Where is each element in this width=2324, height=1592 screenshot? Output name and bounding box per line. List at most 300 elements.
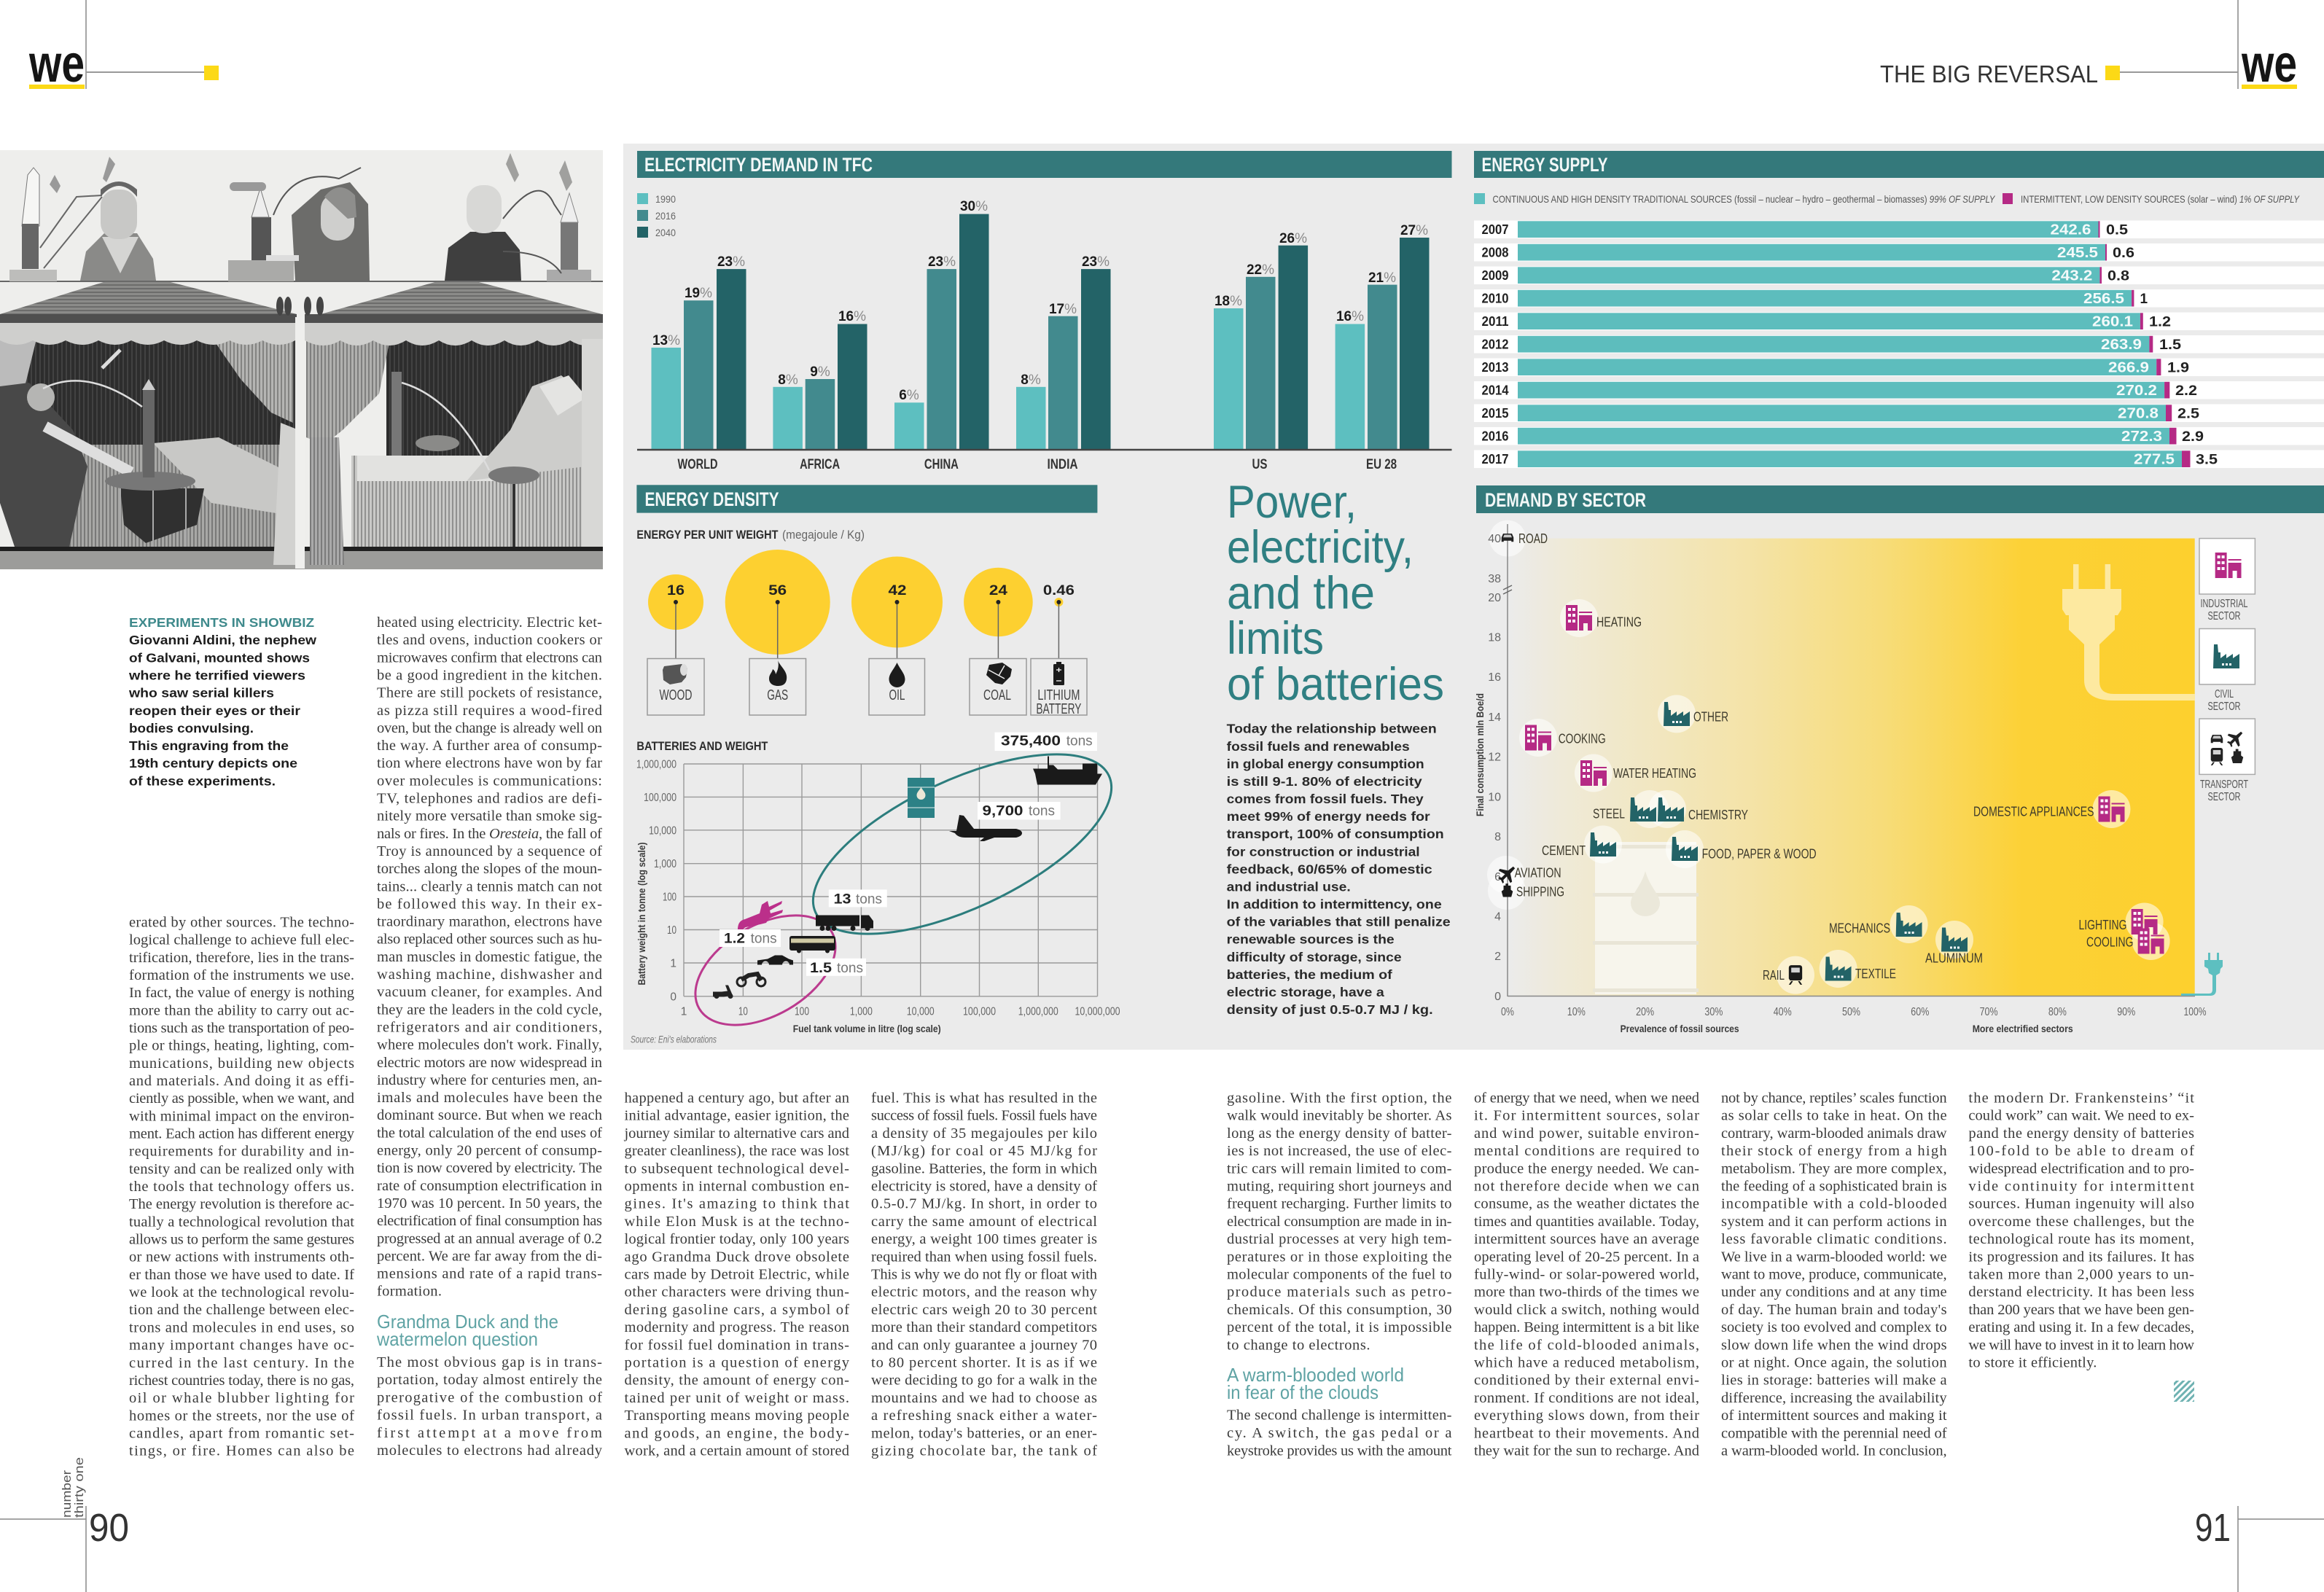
callout: 9,700 tons: 9,700 — [983, 803, 1023, 819]
article column 6: they wait for the sun to recharge. And — [1474, 1443, 1699, 1459]
article column 1: allows us to perform the same gestures — [129, 1232, 354, 1248]
article column 4: This is why we do not fly or float with — [871, 1267, 1097, 1283]
article column 3: modernity and progress. The reason — [624, 1319, 849, 1335]
callout: 1.5 tons — [806, 959, 866, 976]
article column 3: work, and a certain amount of stored — [624, 1443, 849, 1459]
article column 8: its progression and its failures. It has — [1968, 1249, 2194, 1265]
article column 8: we will have to invest in it to learn how — [1968, 1337, 2194, 1353]
icon: plane — [949, 815, 1022, 841]
article column 5: molecular components of the fuel to — [1227, 1267, 1452, 1283]
x axis: 50% — [1842, 1006, 1860, 1018]
x axis: 80% — [2048, 1006, 2067, 1018]
caption: experiments in showbiz: where he terrified viewers — [128, 668, 305, 682]
article column 6: would click a switch, nothing would — [1474, 1302, 1699, 1318]
article column 2: prerogative of the combustion of — [377, 1389, 602, 1405]
main title: limits — [1227, 613, 1324, 664]
article column 1: logical challenge to achieve full elec- — [129, 932, 354, 948]
legend box: transport sector: TRANSPORT — [2200, 779, 2248, 791]
article column 7: contrary, warm-blooded animals draw — [1721, 1125, 1947, 1142]
article column 1: more than the ability to carry out ac- — [129, 1002, 354, 1018]
stacked bar rows: 2007 — [1481, 222, 1509, 237]
right page header — [1880, 0, 2297, 93]
article column 2: traordinary marathon, electrons have — [377, 914, 602, 930]
article column 2: electric motors are now widespread in — [377, 1055, 602, 1071]
article column 7: the feeding of a sophisticated brain is — [1721, 1178, 1947, 1194]
box: gas: GAS — [767, 687, 788, 703]
bar chart: 8% — [1021, 372, 1041, 388]
stacked bar rows: 272.3 — [2121, 429, 2162, 445]
heading — [637, 151, 1452, 178]
point: cooking: COOKING — [1559, 732, 1606, 746]
article column 6: everything slows down, from their — [1474, 1408, 1699, 1424]
bubble chart: energy per unit weight: 42 — [888, 583, 907, 598]
point: cooling — [2086, 929, 2164, 953]
point: shipping — [1502, 883, 1564, 900]
icon: motorbike — [737, 974, 765, 986]
bar chart: 19% — [685, 286, 712, 301]
article column 1: formation of the instruments we use. — [129, 967, 354, 983]
article column 2: they are the leaders in the cold cycle, — [377, 1002, 602, 1018]
panel: energy density — [631, 485, 1136, 1047]
point: shipping: SHIPPING — [1516, 885, 1564, 900]
article column 7: metabolism. They are more complex, — [1721, 1160, 1947, 1177]
point: cement — [1542, 832, 1616, 858]
article column 1: tion and the challenge between elec- — [129, 1302, 354, 1318]
article column 5: peratures or in those exploiting the — [1227, 1249, 1452, 1265]
heading — [636, 485, 1097, 513]
article column 3: for fossil fuel domination in trans- — [624, 1337, 849, 1353]
article column 2: the way. A further area of consump- — [377, 738, 602, 754]
legend box: civil sector: SECTOR — [2207, 701, 2241, 713]
article column 2: be a good ingredient in the kitchen. — [377, 668, 602, 684]
bar chart: 27% — [1400, 223, 1428, 238]
point: steel: STEEL — [1593, 806, 1625, 821]
article column 1: tensity and can be realized only with — [129, 1161, 354, 1177]
article column 3: while Elon Musk is at the techno- — [624, 1214, 849, 1230]
article column 4: were deciding to go for a walk in the — [871, 1373, 1097, 1389]
icon: fuel drum — [908, 778, 935, 818]
callout: 375,400 tons — [994, 733, 1097, 751]
caption: experiments in showbiz: Giovanni Aldini, the nephew — [129, 633, 316, 647]
stacked bar rows: 260.1 — [2092, 313, 2133, 329]
article column 7: under any conditions and at any time — [1721, 1284, 1947, 1300]
point: cement: CEMENT — [1542, 843, 1586, 858]
bar chart: 26% — [1279, 231, 1307, 246]
article column 4: energy, a weight 100 times greater is — [871, 1231, 1097, 1247]
bubble halos — [1487, 520, 2170, 994]
article column 2: progressed at an annual average of 0.2 — [377, 1230, 602, 1246]
article column 5 — [1227, 1090, 1452, 1459]
stacked bar rows: 2008 — [1481, 245, 1509, 260]
article column 3: other characters were driving thun- — [624, 1284, 849, 1300]
article column 5: produce materials such as petro- — [1227, 1284, 1452, 1300]
point: heating — [1566, 605, 1642, 631]
stacked bar rows: 0.5 — [2106, 223, 2128, 238]
main title: electricity, — [1227, 522, 1413, 573]
callout: 1.5 tons: tons — [837, 961, 863, 976]
article column 3: to subsequent technological devel- — [624, 1160, 849, 1177]
article column 2: refrigerators and air conditioners, — [377, 1019, 602, 1035]
point: road — [1502, 531, 1548, 546]
stacked bar rows: 1.9 — [2167, 360, 2189, 376]
bubble chart: energy per unit weight: 16 — [667, 583, 685, 598]
callout: 375,400 tons: tons — [1067, 733, 1093, 749]
article column 2: molecules to electrons had already — [377, 1443, 603, 1459]
article column 2: also replaced other sources such as hu- — [377, 932, 602, 948]
point: lighting: LIGHTING — [2079, 918, 2127, 932]
article column 1: or new actions with instruments oth- — [129, 1249, 354, 1265]
article column 2: heated using electricity. Electric ket- — [377, 614, 602, 631]
intro summary text: feedback, 60/65% of domestic — [1227, 862, 1432, 876]
article column 2: as pizza still requires a wood-fired — [377, 703, 602, 719]
article column 7: incompatible with a cold-blooded — [1721, 1196, 1947, 1212]
article column 8: overcome these challenges, but the — [1968, 1214, 2194, 1230]
box: coal: COAL — [983, 687, 1011, 703]
article column 8: derstand electricity. It has been less — [1968, 1284, 2194, 1300]
x axis title: Fuel tank volume in litre (log scale) — [793, 1023, 941, 1034]
article column 1: In fact, the value of energy is nothing — [129, 985, 354, 1001]
caption: experiments in showbiz: reopen their eyes or their — [129, 703, 300, 718]
article column 7 — [1721, 1090, 1947, 1459]
point: aluminum — [1925, 927, 1983, 965]
bar chart: 23% — [717, 254, 745, 270]
bubble chart: energy per unit weight — [648, 550, 1075, 659]
stacked bar rows: 266.9 — [2108, 360, 2149, 376]
article column 3 — [624, 1090, 850, 1459]
article column 4: electric cars weigh 20 to 30 percent — [871, 1302, 1097, 1318]
caption: experiments in showbiz: who saw serial killers — [128, 686, 274, 701]
log-log chart: batteries and weight: 100 — [795, 1006, 809, 1018]
y axis: 8 — [1494, 831, 1501, 843]
bubble chart: energy per unit weight: 24 — [989, 583, 1007, 598]
log-log chart: batteries and weight: 10,000 — [649, 824, 676, 837]
x axis: 90% — [2117, 1006, 2135, 1018]
callout: 1.2 tons — [720, 929, 781, 947]
article column 4: fuel. This is what has resulted in the — [871, 1090, 1097, 1107]
article column 2: tion where electrons have won by far — [377, 755, 602, 771]
article column 6: and wind power, suitable environ- — [1474, 1125, 1699, 1142]
y axis: 4 — [1494, 911, 1501, 923]
stacked bar rows: 2016 — [1481, 429, 1509, 443]
intro summary text: of the variables that still penalize — [1227, 915, 1451, 929]
article column 2: the total calculation of the end uses of — [377, 1125, 602, 1141]
point: other — [1664, 702, 1728, 726]
callout: 9,700 tons: tons — [1029, 803, 1055, 819]
log-log chart: batteries and weight: 10 — [667, 924, 676, 937]
intro summary text: and industrial use. — [1227, 879, 1351, 894]
y axis: 0 — [1494, 991, 1501, 1003]
article column 6: which have a reduced metabolism, — [1474, 1354, 1699, 1370]
point: mechanics: MECHANICS — [1829, 921, 1890, 936]
heading — [1474, 151, 2324, 178]
bubble chart: energy per unit weight: 56 — [768, 583, 787, 598]
article column 6: the life of cold-blooded animals, — [1474, 1337, 1699, 1353]
article column 2: 1970 was 10 percent. In 50 years, the — [377, 1195, 602, 1211]
stacked bar rows: 0.8 — [2107, 268, 2129, 284]
article column 5: muting, requiring short journeys and — [1227, 1178, 1452, 1194]
caption: experiments in showbiz — [128, 615, 316, 788]
legend box: transport sector — [2199, 719, 2255, 803]
article column 7: their stock of energy from a high — [1721, 1143, 1947, 1159]
stacked bar rows: 2012 — [1481, 337, 1509, 351]
article column 4: mountains and we had to choose as — [871, 1390, 1097, 1406]
panel: energy supply — [1474, 151, 2324, 468]
x axis: 20% — [1636, 1006, 1654, 1018]
stacked bar rows: 2.9 — [2182, 429, 2204, 445]
article column 7: of day. The human brain and today's — [1721, 1302, 1947, 1318]
log-log chart: batteries and weight: 100,000 — [644, 792, 676, 804]
box: oil: OIL — [889, 687, 905, 703]
point: heating: HEATING — [1596, 615, 1642, 630]
stacked bar rows: 2009 — [1481, 268, 1509, 283]
engraving: Aldini experiments — [0, 150, 603, 569]
article column 2: nals or fires. In the Oresteia, the fall of — [377, 826, 602, 842]
article column 2: tion is now covered by electricity. The — [377, 1160, 602, 1177]
article column 1: and materials. And doing it as effi- — [129, 1073, 354, 1089]
article column 5: frequent recharging. Further limits to — [1227, 1196, 1452, 1212]
article column 6: produce the energy needed. We can- — [1474, 1160, 1699, 1177]
article column 3: journey similar to alternative cars and — [624, 1125, 849, 1142]
article column 5: walk would inevitably be shorter. As — [1227, 1108, 1452, 1124]
legend: INTERMITTENT, LOW DENSITY SOURCES (solar – wind) 1% OF SUPPLY — [2021, 193, 2300, 205]
bar chart: 17% — [1049, 302, 1077, 317]
subheading: Grandma Duck — [376, 1311, 558, 1350]
bar chart: 16% — [838, 309, 866, 324]
stacked bar rows: 245.5 — [2057, 245, 2098, 261]
bar chart: WORLD — [678, 457, 717, 472]
y axis: 2 — [1494, 951, 1501, 963]
main title — [1227, 477, 1444, 710]
panel: demand by sector — [1474, 485, 2324, 1034]
subheading: warm-blooded world: in fear of the clouds — [1227, 1381, 1379, 1403]
article column 5: percent of the total, it is impossible — [1227, 1319, 1452, 1335]
point: steel — [1593, 797, 1656, 822]
y axis: 16 — [1488, 671, 1501, 684]
article column 4: required than when using fossil fuels. — [871, 1249, 1097, 1265]
point: lighting — [2079, 909, 2158, 934]
article column 5: ies is not increased, the use of elec- — [1227, 1143, 1452, 1159]
legend: 2040 — [655, 227, 676, 238]
article column 2: tains... clearly a tennis match can not — [377, 878, 602, 894]
article column 3: dering gasoline cars, a symbol of — [624, 1302, 849, 1318]
box: oil — [869, 659, 924, 715]
log-log chart: batteries and weight — [636, 717, 1136, 1047]
article column 2: industry where for centuries men, an- — [377, 1072, 602, 1088]
point: textile: TEXTILE — [1855, 967, 1896, 981]
x axis — [1501, 1006, 2206, 1034]
stacked bar rows: 2011 — [1481, 314, 1509, 329]
article column 1: tions such as the transportation of peo- — [129, 1021, 354, 1037]
logo: we: we — [28, 35, 85, 93]
x axis: 40% — [1774, 1006, 1792, 1018]
article column 3: portation is a question of energy — [624, 1354, 850, 1370]
article column 8: widespread electrification and to pro- — [1968, 1160, 2194, 1177]
issue label — [60, 1457, 86, 1518]
point: chemistry — [1658, 797, 1748, 822]
end mark: hatched square — [2174, 1381, 2194, 1402]
article column 7: of intermittent sources and making it — [1721, 1408, 1947, 1424]
point: textile — [1825, 956, 1896, 981]
callout: 1.5 tons: 1.5 — [810, 961, 832, 976]
callout: 1.2 tons: 1.2 — [724, 932, 745, 946]
article column 1: trification, therefore, lies in the trans- — [129, 950, 354, 966]
legend box: industrial sector — [2199, 539, 2255, 623]
log-log chart: batteries and weight: 1 — [670, 958, 676, 969]
article column 6: operating level of 20-25 percent. In a — [1474, 1249, 1699, 1265]
point: food, paper and wood — [1672, 837, 1817, 862]
article column 5: chemicals. Of this consumption, 30 — [1227, 1302, 1452, 1318]
log-log chart: batteries and weight: 1,000,000 — [1018, 1006, 1058, 1018]
caption: experiments in showbiz: of these experiments. — [129, 773, 276, 788]
article column 6: of energy that we need, when we need — [1474, 1090, 1699, 1107]
icon: magenta plug — [738, 901, 783, 934]
article column 1 — [129, 914, 355, 1459]
point: cooling: COOLING — [2086, 934, 2133, 949]
article column 6: fully-wind- or solar-powered world, — [1474, 1267, 1699, 1283]
article column 6: times and quantities available. Today, — [1474, 1214, 1699, 1230]
y axis: 6 — [1494, 871, 1501, 883]
article column 7: slow down life when the wind drops — [1721, 1337, 1947, 1353]
article column 2: portation, today almost entirely the — [377, 1372, 602, 1388]
bar chart: INDIA — [1047, 457, 1078, 472]
article column 2: There are still pockets of resistance, — [377, 685, 602, 701]
magenta ellipse: electric — [676, 893, 854, 1047]
legend: CONTINUOUS AND HIGH DENSITY TRADITIONAL SOURCES (fossil – nuclear – hydro – geothermal – biomasses) 99% OF SUPPLY — [1493, 193, 1996, 205]
article column 7: as solar cells to take in heat. On the — [1721, 1108, 1947, 1124]
article column 2: vacuum cleaner, for examples. And — [377, 984, 602, 1000]
icon: scooter — [713, 986, 733, 999]
subheading: energy per unit weight: (megajoule / Kg) — [782, 528, 865, 542]
article column 8: could work” can wait. We need to ex- — [1968, 1108, 2194, 1124]
bar chart: 22% — [1247, 262, 1274, 278]
legend box: civil sector — [2199, 628, 2255, 713]
intro summary text: transport, 100% of consumption — [1227, 827, 1444, 841]
article column 2: where molecules don't work. Finally, — [377, 1037, 602, 1053]
callout: 13 tons: 13 — [834, 892, 851, 907]
article column 1: curred in the last century. In the — [129, 1355, 354, 1371]
x axis: 70% — [1980, 1006, 1998, 1018]
article column 2: mensions and rate of a rapid trans- — [377, 1266, 602, 1282]
intro summary text — [1227, 722, 1451, 1017]
box: coal — [970, 659, 1026, 715]
log-log chart: batteries and weight: 10 — [738, 1006, 748, 1018]
article column 8: technological route has its moment, — [1968, 1231, 2194, 1247]
article column 1: many important changes have oc- — [129, 1338, 354, 1354]
caption: experiments in showbiz: This engraving from the — [129, 738, 289, 753]
article column 3: Transporting means moving people — [624, 1408, 849, 1424]
caption: experiments in showbiz: 19th century depicts one — [129, 756, 297, 770]
article column 2: fossil fuels. In urban transport, a — [377, 1408, 602, 1424]
article column 6: happen. Being intermittent is a bit like — [1474, 1319, 1699, 1335]
point: aluminum: ALUMINUM — [1925, 951, 1983, 965]
grey infographic panel — [623, 144, 2324, 1050]
bar chart: EU 28 — [1366, 457, 1397, 472]
stacked bar rows: 270.2 — [2116, 383, 2157, 399]
article column 4: a density of 35 megajoules per kilo — [871, 1125, 1097, 1142]
article column 2: first attempt at a move from — [377, 1425, 602, 1441]
article column 5: long as the energy density of batter- — [1227, 1125, 1452, 1142]
x axis: 10% — [1567, 1006, 1586, 1018]
article column 8: to store it efficiently. — [1968, 1354, 2097, 1370]
legend: 2016 — [655, 210, 676, 222]
article column 6: conditioned by their external envi- — [1474, 1373, 1699, 1389]
article column 6: more than two-thirds of the times we — [1474, 1284, 1699, 1300]
bar chart: AFRICA — [800, 457, 840, 472]
article column 8 — [1968, 1090, 2194, 1370]
bar chart: 18% — [1214, 294, 1242, 309]
bar chart: 30% — [960, 199, 988, 214]
y axis title: Final consumption mln Boe/d — [1474, 693, 1486, 816]
article column 1: homes or the streets, nor the use of — [129, 1408, 354, 1424]
log-log chart: batteries and weight: 0 — [670, 991, 676, 1003]
page number 90: 90 — [89, 1506, 129, 1550]
log-log chart: batteries and weight: 10,000 — [907, 1006, 935, 1018]
caption: experiments in showbiz: of Galvani, mounted shows — [129, 650, 310, 665]
log-log chart: batteries and weight: 1,000,000 — [636, 758, 676, 771]
log-log chart: batteries and weight: 1,000 — [654, 858, 676, 870]
subheading: batteries and weight: BATTERIES AND WEIGHT — [636, 739, 768, 753]
callout: 13 tons: tons — [856, 892, 882, 907]
stacked bar rows: 2013 — [1481, 360, 1509, 375]
issue label: thirty one — [72, 1457, 86, 1518]
y axis — [1474, 524, 2195, 1003]
article column 4: electricity is stored, have a density of — [871, 1178, 1097, 1194]
box: lithium battery: LITHIUM — [1037, 687, 1080, 703]
article column 2: Troy is announced by a sequence of — [377, 843, 602, 859]
article column 7: system and it can perform actions in — [1721, 1214, 1947, 1230]
intro summary text: batteries, the medium of — [1227, 967, 1392, 982]
article column 8: than 200 years that we have been gen- — [1968, 1302, 2194, 1318]
article column 6: it. For intermittent sources, solar — [1474, 1108, 1699, 1124]
article column 3: gines. It's amazing to think that — [624, 1196, 849, 1212]
article column 8: sources. Human ingenuity will also — [1968, 1196, 2194, 1212]
article column 2: energy, only 20 percent of consump- — [377, 1143, 602, 1159]
subheading: energy per unit weight: ENERGY PER UNIT WEIGHT — [636, 528, 779, 542]
intro summary text: density of just 0.5-0.7 MJ / kg. — [1227, 1002, 1433, 1017]
article column 1: ment. Each action has different energy — [129, 1125, 355, 1142]
article column 3: and goods, an engine, the body- — [624, 1425, 849, 1441]
caption: experiments in showbiz: bodies convulsing. — [129, 721, 254, 735]
article column 4: melon, today's batteries, or an ener- — [871, 1425, 1097, 1441]
point: road: ROAD — [1518, 531, 1548, 546]
gradient plot area — [1508, 539, 2195, 996]
bar chart: 9% — [810, 364, 830, 380]
y axis title: Battery weight in tonne (log scale) — [636, 843, 647, 986]
heading — [1476, 485, 2324, 513]
article column 2: over molecules is communications: — [377, 773, 602, 789]
article column 2: tles and ovens, induction cookers or — [377, 632, 602, 648]
article column 4: gizing chocolate bar, the tank of — [871, 1443, 1097, 1459]
article column 3: ago Grandma Duck drove obsolete — [624, 1249, 849, 1265]
stacked bar rows: 3.5 — [2196, 452, 2218, 468]
point: other: OTHER — [1693, 710, 1728, 725]
y axis: 18 — [1488, 631, 1501, 644]
article column 1: we look at the technological revolu- — [129, 1284, 354, 1300]
intro summary text: In addition to intermittency, one — [1227, 897, 1442, 911]
point: food, paper and wood: FOOD, PAPER & WOOD — [1702, 847, 1817, 862]
bubble chart: energy per unit weight: 0.46 — [1043, 583, 1075, 598]
stacked bar rows: 2.5 — [2177, 407, 2199, 421]
article column 2: man muscles in domestic fatigue, the — [377, 949, 602, 965]
article column 3: initial advantage, easier ignition, the — [624, 1108, 849, 1124]
stacked bar rows: 263.9 — [2101, 337, 2142, 353]
article column 2: The most obvious gap is in trans- — [377, 1354, 602, 1370]
article column 2: nitely more versatile than smoke sig- — [377, 808, 602, 824]
point: rail — [1763, 965, 1802, 985]
article column 4: carry the same amount of electrical — [871, 1214, 1097, 1230]
stacked bar rows: 256.5 — [2083, 291, 2124, 307]
article column 7: compatible with the perennial need of — [1721, 1425, 1947, 1441]
